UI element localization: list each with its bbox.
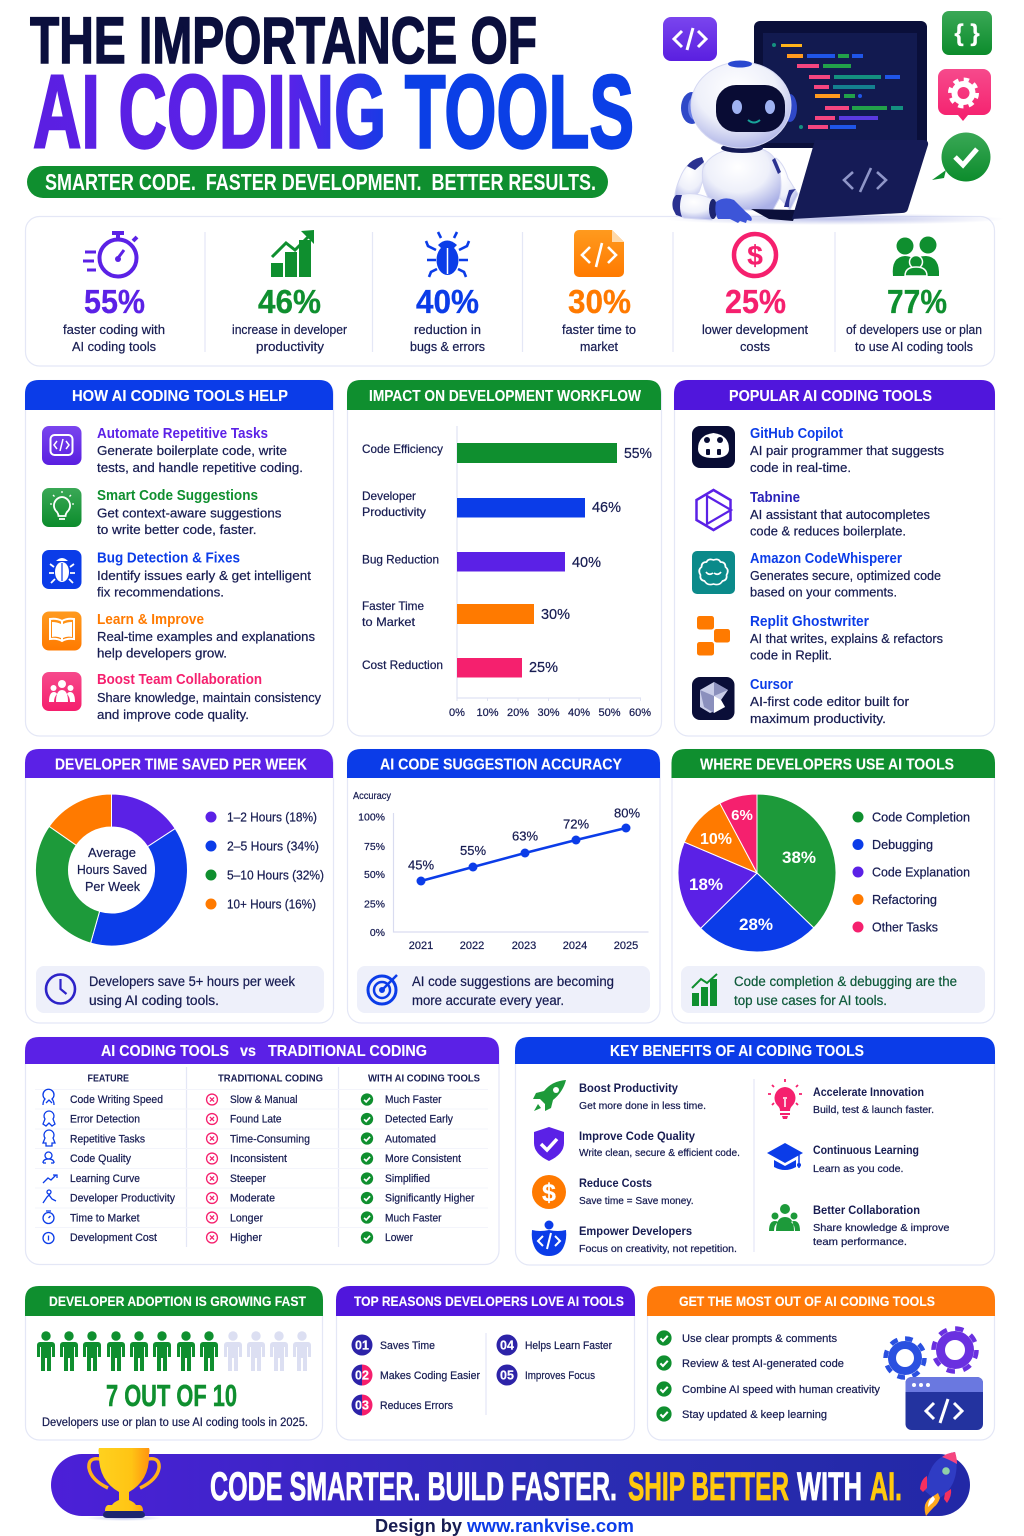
panel: impact on development workflow <box>347 380 662 736</box>
legend: Other Tasks <box>872 920 938 934</box>
stat: 40% fewer bugs: reduction in <box>414 322 481 337</box>
line chart <box>353 791 648 952</box>
footer credit: www.rankvise.com <box>466 1516 634 1536</box>
callout <box>357 966 650 1013</box>
code monitor <box>754 21 927 148</box>
legend: 2–5 Hours (34%) <box>227 838 319 854</box>
stat: 25% lower cost: $ <box>747 240 763 271</box>
benefit: boost productivity: Boost Productivity <box>579 1083 679 1095</box>
line chart: 80% <box>614 806 640 820</box>
bar chart: 30% <box>541 606 570 623</box>
icon: gear speech tile <box>938 69 991 121</box>
tool: Replit Ghostwriter: Replit Ghostwriter <box>750 614 869 630</box>
panel: key statistics <box>26 216 994 366</box>
stat: 55% faster coding: faster coding with <box>63 322 165 337</box>
icon: gears <box>886 1328 976 1378</box>
benefit: better collaboration: Better Collaboration <box>813 1205 920 1217</box>
line chart: Accuracy <box>353 791 391 802</box>
bar chart: 25% <box>529 659 558 676</box>
benefit: empower developers: Empower Developers <box>579 1226 692 1238</box>
donut centre label: Average <box>88 845 136 860</box>
icon: braces tile <box>942 11 992 55</box>
panel: key benefits of AI coding tools <box>515 1037 995 1265</box>
donut centre label: Hours Saved <box>77 862 147 877</box>
heading: POPULAR AI CODING TOOLS <box>729 388 932 405</box>
benefit: reduce costs: $ <box>542 1179 556 1207</box>
stat: 25% lower cost: 25% <box>725 283 786 320</box>
item: learn and improve: Real-time examples and explanations <box>97 629 315 644</box>
with AI coding tools column: Lower <box>385 1232 413 1244</box>
panel: popular AI coding tools <box>674 380 995 736</box>
stat: 30% faster to market: faster time to <box>562 322 636 337</box>
heading: GET THE MOST OUT OF AI CODING TOOLS <box>679 1293 935 1309</box>
reason list: Reduces Errors <box>380 1400 453 1412</box>
line chart: 75% <box>364 841 385 853</box>
traditional coding column <box>207 1094 310 1244</box>
legend: Code Completion <box>872 810 970 824</box>
pie chart <box>678 794 836 952</box>
with AI coding tools column: More Consistent <box>385 1153 461 1165</box>
stat: 77% of developers: 77% <box>887 283 947 320</box>
item: learn and improve <box>42 612 315 660</box>
robot forearm and hand <box>672 194 752 223</box>
item: bug detection and fixes <box>42 550 311 600</box>
icon: rocket <box>920 1452 957 1516</box>
donut centre label: Per Week <box>85 879 140 894</box>
with AI coding tools column: Much Faster <box>385 1212 442 1224</box>
subtitle pill <box>27 166 608 198</box>
stat: 55% faster coding <box>63 233 165 354</box>
tool: Amazon CodeWhisperer: Amazon CodeWhisperer <box>750 551 902 567</box>
table header: TRADITIONAL CODING <box>218 1072 323 1084</box>
with AI coding tools column: Significantly Higher <box>385 1192 475 1204</box>
reason list: 01 <box>355 1338 369 1352</box>
heading <box>674 380 995 410</box>
callout: top use cases for AI tools. <box>734 993 887 1008</box>
tool: Replit Ghostwriter: code in Replit. <box>750 648 832 662</box>
heading <box>347 749 660 778</box>
benefit: boost productivity <box>533 1080 706 1112</box>
heading: KEY BENEFITS OF AI CODING TOOLS <box>610 1043 864 1060</box>
line chart: 25% <box>364 898 385 910</box>
title: The Importance of AI Coding Tools: THE IMPORTANCE OF <box>30 4 537 77</box>
panel: how AI coding tools help <box>25 380 334 736</box>
bar chart: Productivity <box>362 505 426 519</box>
heading <box>336 1286 635 1316</box>
bar chart: Faster Time <box>362 599 424 613</box>
traditional coding column: Time-Consuming <box>230 1134 310 1146</box>
stat: 25% lower cost <box>702 234 808 354</box>
tool: Amazon CodeWhisperer <box>692 551 941 600</box>
benefit: reduce costs: Reduce Costs <box>579 1178 652 1190</box>
item: learn and improve: Learn & Improve <box>97 612 204 628</box>
title: The Importance of AI Coding Tools <box>30 4 634 170</box>
heading <box>515 1037 995 1064</box>
table header: FEATURE <box>88 1072 129 1084</box>
panel: developer time saved per week <box>25 749 334 1023</box>
bar chart <box>362 426 652 719</box>
stat: 46% productivity: productivity <box>256 339 325 354</box>
traditional coding column: Moderate <box>230 1192 275 1204</box>
line chart: 55% <box>460 843 486 858</box>
icon: braces tile: { } <box>954 20 980 47</box>
reason list: Improves Focus <box>525 1370 595 1382</box>
legend: 5–10 Hours (32%) <box>227 868 324 882</box>
legend <box>852 810 970 934</box>
tool: Cursor: maximum productivity. <box>750 711 886 726</box>
caption: Developers use or plan to use AI coding tools in 2025. <box>42 1417 308 1429</box>
stat: 40% fewer bugs: bugs & errors <box>410 339 485 354</box>
reason list: Helps Learn Faster <box>525 1340 612 1352</box>
icon: code tile <box>663 17 717 61</box>
with AI coding tools column: Simplified <box>385 1173 430 1185</box>
pictogram: people <box>37 1331 311 1371</box>
tool: GitHub Copilot <box>692 426 944 475</box>
feature column: Learning Curve <box>70 1173 140 1185</box>
tool: Tabnine: Tabnine <box>750 490 800 506</box>
reason list <box>352 1334 612 1416</box>
icon: trophy <box>86 1448 162 1521</box>
item: smart code suggestions: Smart Code Suggestions <box>97 488 258 504</box>
bar chart: 40% <box>568 707 590 719</box>
heading: WHERE DEVELOPERS USE AI TOOLS <box>700 756 954 774</box>
benefit: accelerate innovation <box>768 1079 934 1119</box>
bar chart: 40% <box>572 554 601 571</box>
panel: get the most out of AI coding tools <box>647 1286 995 1440</box>
traditional coding column: Steeper <box>230 1173 266 1185</box>
feature column: Development Cost <box>70 1232 157 1244</box>
bar chart: to Market <box>362 615 416 629</box>
feature column: Developer Productivity <box>70 1192 175 1204</box>
heading: AI CODE SUGGESTION ACCURACY <box>380 756 622 774</box>
title: The Importance of AI Coding Tools: AI CODING TOOLS <box>33 54 634 170</box>
donut centre label <box>77 845 147 894</box>
item: smart code suggestions: to write better code, faster. <box>97 522 256 537</box>
stat: 25% lower cost: costs <box>740 339 770 354</box>
benefit: accelerate innovation: Build, test & launch faster. <box>813 1104 934 1116</box>
tool: Amazon CodeWhisperer: Generates secure, optimized code <box>750 568 941 583</box>
stat: 30% faster to market: market <box>580 339 618 354</box>
callout: AI code suggestions are becoming <box>412 974 614 989</box>
with AI coding tools column: Much Faster <box>385 1094 442 1106</box>
line chart: 45% <box>408 858 434 872</box>
subtitle pill: SMARTER CODE. FASTER DEVELOPMENT. BETTER RESULTS. <box>45 169 596 195</box>
legend <box>206 810 324 912</box>
stat: 40% fewer bugs: 40% <box>416 283 479 320</box>
tool: GitHub Copilot: GitHub Copilot <box>750 426 843 442</box>
heading <box>25 749 333 778</box>
line chart: 50% <box>364 869 385 881</box>
tool: GitHub Copilot: AI pair programmer that suggests <box>750 443 944 458</box>
traditional coding column: Slow & Manual <box>230 1094 298 1106</box>
line chart: 72% <box>563 816 589 832</box>
tool: Amazon CodeWhisperer: based on your comments. <box>750 584 897 600</box>
stat: 30% faster to market: 30% <box>568 283 631 320</box>
callout <box>681 966 985 1013</box>
reason list: 03 <box>355 1398 369 1412</box>
heading: AI CODING TOOLS <box>101 1043 229 1060</box>
legend: Refactoring <box>872 892 937 907</box>
legend: Debugging <box>872 837 933 852</box>
stat: 55% faster coding: AI coding tools <box>72 339 156 354</box>
reason list: Saves Time <box>380 1340 435 1352</box>
traditional coding column: Longer <box>230 1212 263 1224</box>
tool: Cursor <box>692 677 910 726</box>
robot <box>665 60 1005 225</box>
item: boost team collaboration: Share knowledge, maintain consistency <box>97 690 321 705</box>
tips list: Stay updated & keep learning <box>682 1409 827 1421</box>
stat: 55% faster coding: 55% <box>84 283 145 320</box>
item: boost team collaboration: and improve code quality. <box>97 707 249 722</box>
pie chart: 6% <box>731 807 753 824</box>
item: bug detection and fixes: Identify issues early & get intelligent <box>97 568 311 583</box>
benefit: improve code quality: Write clean, secure & efficient code. <box>579 1147 740 1159</box>
pie chart: 10% <box>700 831 732 848</box>
tool: Tabnine: AI assistant that autocompletes <box>750 507 930 522</box>
stat: 30% faster to market <box>562 230 636 354</box>
heading <box>25 1286 323 1316</box>
banner: call to action: AI. <box>870 1465 902 1509</box>
tool: Replit Ghostwriter <box>697 614 943 662</box>
benefit: accelerate innovation: Accelerate Innovation <box>813 1087 924 1099</box>
stat: 77% of developers: to use AI coding tools <box>855 339 973 354</box>
heading: vs <box>240 1043 256 1060</box>
bar chart: Cost Reduction <box>362 658 443 672</box>
with AI coding tools column: Automated <box>385 1134 436 1146</box>
feature column: Code Writing Speed <box>70 1094 163 1106</box>
tool: Cursor: Cursor <box>750 677 793 693</box>
heading <box>672 749 995 778</box>
item: boost team collaboration: Boost Team Collaboration <box>97 672 262 688</box>
traditional coding column: Found Late <box>230 1114 282 1126</box>
pie chart: 28% <box>739 915 773 934</box>
panel: top reasons developers love AI tools <box>336 1286 635 1440</box>
pie chart: 38% <box>782 848 816 867</box>
panel: AI coding tools vs traditional coding <box>25 1037 499 1264</box>
stat: 46% productivity: 46% <box>258 283 321 320</box>
heading: DEVELOPER TIME SAVED PER WEEK <box>55 756 307 774</box>
legend: 10+ Hours (16%) <box>227 896 316 912</box>
bar chart: Code Efficiency <box>362 442 443 456</box>
tool: Tabnine: code & reduces boilerplate. <box>750 524 906 538</box>
tool: Tabnine <box>696 490 930 538</box>
feature column: Time to Market <box>70 1212 140 1224</box>
hero illustration: robot with laptop and code screen <box>663 11 1005 225</box>
banner: call to action: SHIP BETTER <box>628 1465 789 1509</box>
stat: 40% fewer bugs <box>410 232 485 354</box>
reason list: Makes Coding Easier <box>380 1370 480 1382</box>
line chart: 2022 <box>460 940 484 952</box>
tips list <box>656 1330 881 1422</box>
bar chart: 60% <box>629 707 651 719</box>
feature column: Repetitive Tasks <box>70 1134 145 1146</box>
pie chart: 18% <box>689 875 723 894</box>
feature column <box>43 1089 175 1244</box>
legend: Code Explanation <box>872 864 970 880</box>
callout: more accurate every year. <box>412 993 564 1008</box>
benefit: better collaboration: team performance. <box>813 1236 907 1248</box>
tips list: Use clear prompts & comments <box>682 1333 838 1345</box>
bar chart: Bug Reduction <box>362 552 439 566</box>
traditional coding column: Inconsistent <box>230 1153 287 1165</box>
footer credit: Design by <box>375 1516 462 1536</box>
tool: GitHub Copilot: code in real-time. <box>750 460 851 475</box>
banner: call to action: CODE SMARTER. BUILD FASTER. <box>210 1465 617 1509</box>
item: automate repetitive tasks: Generate boilerplate code, write <box>97 443 287 458</box>
benefit: empower developers: Focus on creativity, not repetition. <box>579 1243 737 1255</box>
heading: HOW AI CODING TOOLS HELP <box>72 388 288 405</box>
item: smart code suggestions <box>42 488 282 537</box>
reason list: 05 <box>500 1368 514 1382</box>
reason list: 04 <box>500 1338 514 1352</box>
benefit: continuous learning: Continuous Learning <box>813 1145 919 1157</box>
benefit: boost productivity: Get more done in less time. <box>579 1100 706 1112</box>
icon: code window <box>906 1377 983 1430</box>
footer credit <box>375 1516 634 1536</box>
callout: Developers save 5+ hours per week <box>89 974 295 989</box>
heading: TOP REASONS DEVELOPERS LOVE AI TOOLS <box>354 1293 624 1309</box>
heading: IMPACT ON DEVELOPMENT WORKFLOW <box>369 388 642 405</box>
banner: call to action <box>51 1448 970 1521</box>
callout: using AI coding tools. <box>89 993 219 1008</box>
benefit: continuous learning <box>767 1143 919 1175</box>
item: automate repetitive tasks: tests, and handle repetitive coding. <box>97 460 303 475</box>
item: automate repetitive tasks: Automate Repetitive Tasks <box>97 426 268 442</box>
heading: TRADITIONAL CODING <box>268 1043 427 1060</box>
item: bug detection and fixes: Bug Detection & Fixes <box>97 550 240 566</box>
stat: 77% of developers: of developers use or plan <box>846 322 982 337</box>
item: bug detection and fixes: fix recommendations. <box>97 584 224 600</box>
heading <box>647 1286 995 1316</box>
bar chart: 50% <box>598 707 621 719</box>
bar chart: 30% <box>537 707 560 719</box>
stat: 46% productivity: increase in developer <box>232 322 348 337</box>
big statistic: 7 OUT OF 10 <box>106 1378 237 1413</box>
benefit: improve code quality: Improve Code Quality <box>579 1131 696 1143</box>
bar chart: 46% <box>592 499 621 516</box>
item: smart code suggestions: Get context-aware suggestions <box>97 506 282 520</box>
bar chart: 20% <box>507 707 529 719</box>
benefit: empower developers <box>532 1220 737 1256</box>
line chart: 0% <box>370 927 385 939</box>
panel: where developers use AI tools <box>672 749 995 1023</box>
banner: call to action: WITH <box>797 1465 862 1509</box>
with AI coding tools column: Detected Early <box>385 1114 453 1126</box>
reason list: 02 <box>355 1368 369 1382</box>
tips list: Combine AI speed with human creativity <box>682 1384 881 1396</box>
item: boost team collaboration <box>42 672 321 722</box>
bar chart: 10% <box>476 707 499 719</box>
tool: Replit Ghostwriter: AI that writes, explains & refactors <box>750 631 943 646</box>
benefit: continuous learning: Learn as you code. <box>813 1163 904 1175</box>
heading <box>347 380 661 410</box>
legend: 1–2 Hours (18%) <box>227 810 317 824</box>
traditional coding column: Higher <box>230 1232 262 1244</box>
benefit: better collaboration: Share knowledge & improve <box>813 1222 950 1234</box>
stat: 25% lower cost: lower development <box>702 322 808 337</box>
donut chart <box>35 794 187 946</box>
benefit: better collaboration <box>769 1204 950 1248</box>
icon: check bubble <box>932 132 990 182</box>
benefit: reduce costs <box>532 1175 694 1209</box>
line chart: 2024 <box>563 940 587 952</box>
table header <box>88 1072 480 1084</box>
line chart: 2023 <box>512 940 536 952</box>
heading <box>25 1037 499 1064</box>
panel: developer adoption <box>25 1286 323 1440</box>
benefit: improve code quality <box>534 1127 740 1161</box>
item: learn and improve: help developers grow. <box>97 646 227 660</box>
with AI coding tools column <box>361 1093 475 1244</box>
bar chart: Developer <box>362 489 416 503</box>
table header: WITH AI CODING TOOLS <box>368 1072 480 1084</box>
callout <box>36 966 324 1013</box>
line chart: 2025 <box>614 940 638 952</box>
bar chart: 55% <box>624 445 652 462</box>
panel: AI code suggestion accuracy <box>347 749 660 1023</box>
line chart: 2021 <box>409 940 433 952</box>
stat: 46% productivity <box>232 230 348 354</box>
bar chart: 0% <box>449 707 465 719</box>
feature column: Error Detection <box>70 1114 140 1126</box>
heading: DEVELOPER ADOPTION IS GROWING FAST <box>49 1293 306 1309</box>
tips list: Review & test AI-generated code <box>682 1358 844 1370</box>
line chart: 100% <box>358 812 385 824</box>
callout: Code completion & debugging are the <box>734 974 957 989</box>
heading <box>25 380 333 410</box>
laptop <box>751 140 928 221</box>
benefit: reduce costs: Save time = Save money. <box>579 1195 694 1207</box>
tool: Cursor: AI-first code editor built for <box>750 694 910 709</box>
stat: 77% of developers <box>846 236 982 354</box>
line chart: 63% <box>512 828 538 844</box>
item: automate repetitive tasks <box>42 426 303 475</box>
feature column: Code Quality <box>70 1153 131 1165</box>
